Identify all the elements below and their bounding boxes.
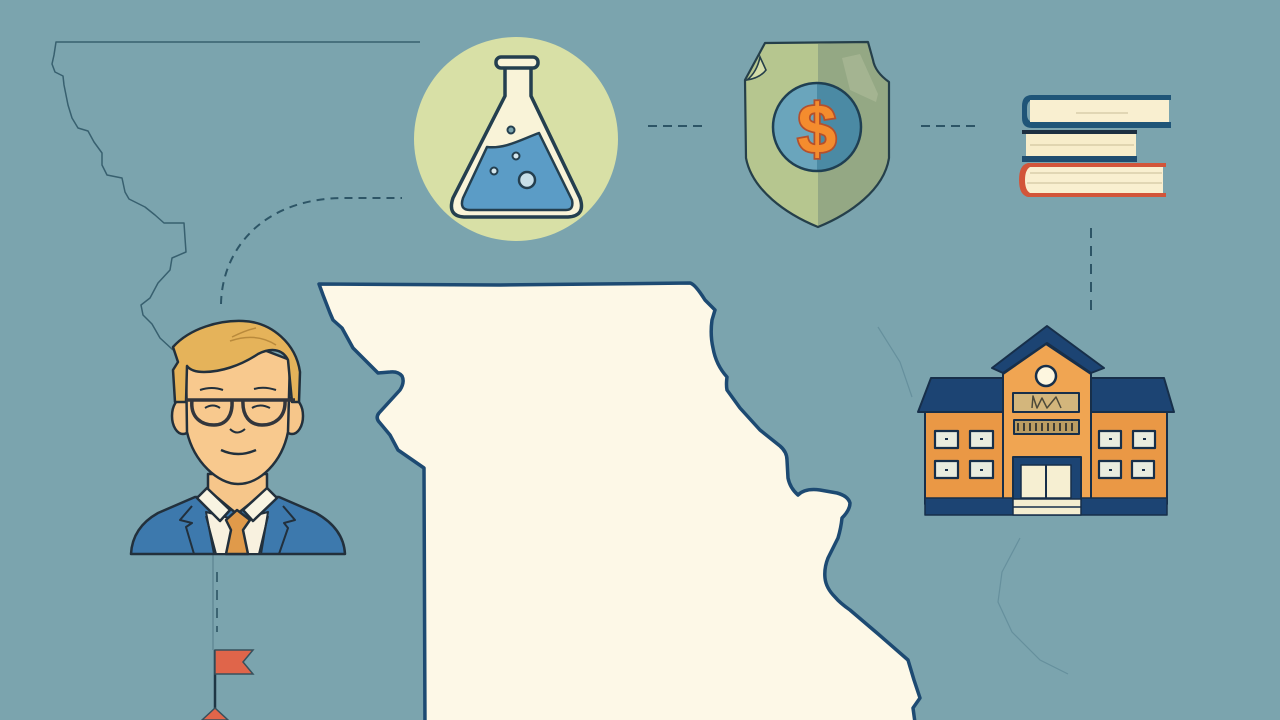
connector: shield to books	[921, 125, 981, 127]
shirt	[206, 512, 268, 554]
connector: map to flask	[221, 198, 402, 304]
lapels	[180, 506, 295, 554]
icon: shield with dollar	[745, 42, 889, 227]
map: faint outline right	[878, 327, 1068, 674]
connector: books to school	[1090, 228, 1092, 312]
icon: flask	[414, 37, 618, 241]
connector: flask to shield	[648, 125, 704, 127]
icon: flag marker	[202, 650, 253, 720]
hair	[173, 321, 300, 402]
brows and eyes	[200, 388, 276, 408]
nose	[230, 429, 245, 432]
icon: stack of books	[1019, 95, 1171, 197]
tie	[226, 510, 250, 554]
connector: person to flag	[213, 555, 217, 650]
dollar sign: $	[798, 90, 836, 168]
map: Missouri state shape	[319, 283, 920, 720]
smile	[221, 450, 256, 454]
icon: person with glasses	[131, 321, 345, 554]
glasses	[186, 400, 295, 425]
jacket	[131, 497, 345, 554]
face	[186, 340, 290, 484]
map: faint outline upper left	[52, 42, 420, 350]
ears	[172, 398, 194, 434]
collar	[197, 488, 277, 521]
neck	[208, 474, 267, 514]
icon: school building	[918, 326, 1174, 515]
